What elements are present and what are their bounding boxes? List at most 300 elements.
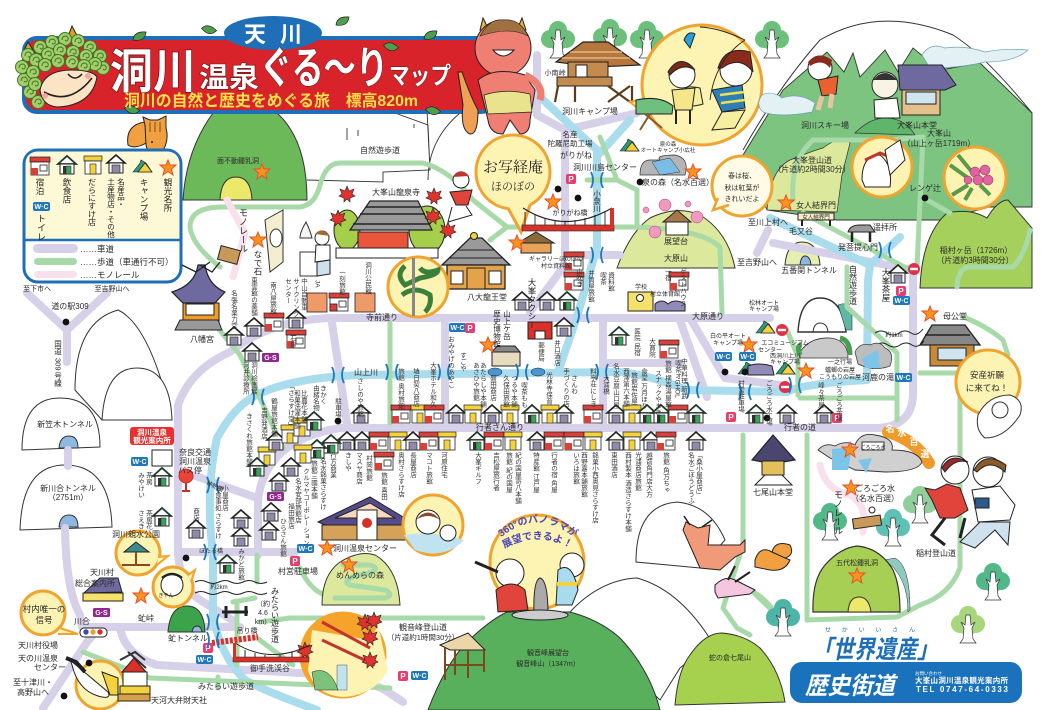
title text: 洞川 <box>110 45 196 98</box>
shop labels above road: ごろごろ茶屋 <box>834 381 843 422</box>
名水百選 arc <box>885 423 930 463</box>
callout: 春は桜、秋は紅葉がきれいだよ: 春は桜、 <box>728 171 756 180</box>
temple: 七尾山本堂 <box>752 435 795 485</box>
mountain: 稲村ヶ岳 <box>920 200 1032 288</box>
map place names: 村立資料館 <box>541 262 571 270</box>
hill: めんめらの森 <box>322 554 400 605</box>
名水百選 arc: 名 <box>885 423 895 434</box>
shop labels below road, left block: クルマヤコーポレーション <box>302 468 310 546</box>
shop labels below road, left block: お食事処 さらすけ <box>214 485 222 539</box>
shop labels above road: 盤田商店 <box>488 374 497 402</box>
map place names: キャンプ場 <box>770 358 800 366</box>
monolith: なで石 <box>265 210 283 272</box>
mountain: 面不動鍾乳洞 <box>183 113 307 200</box>
map place names: 天の川温泉 <box>18 653 58 663</box>
no entry signs <box>776 263 920 393</box>
shop labels below road, right block: 大峯ギルフ <box>474 451 482 485</box>
shop labels above road: 大浦橋 <box>602 374 610 396</box>
map place names: 洞川スキー場 <box>801 120 849 130</box>
map place names: 奈良交通 <box>179 447 211 457</box>
map place names: 大峯登山道 <box>792 155 832 165</box>
vertical road and place labels: 309 <box>54 358 62 371</box>
shop labels above road: おみやげのあやこ <box>446 336 455 388</box>
vertical road and place labels: みたらい遊歩道 <box>270 587 280 644</box>
map place names: 名産 <box>562 129 578 139</box>
map place names: 七尾山本堂 <box>753 487 793 497</box>
map place names: 毛又谷 <box>789 226 813 236</box>
legend labels: 飲食店 <box>62 177 72 204</box>
shop labels above road: 旅館 奥村旅館 <box>396 367 405 410</box>
squirrel <box>128 116 167 155</box>
shop labels above road: 東雲館の薬舗 <box>250 276 258 317</box>
shop labels below road, right block: 光浦商店旅館 <box>634 451 642 492</box>
shop labels above road: 資料館 <box>606 271 615 293</box>
shop labels below road, left block: 村岡旅館 <box>364 454 373 482</box>
shop labels below road, left block: マスヤ商店 <box>354 452 363 486</box>
map place names: 泉の森 <box>660 140 677 148</box>
map place names: ギャラリーほのぼの <box>529 256 583 263</box>
map place names: レンゲ辻 <box>909 183 941 193</box>
shop labels below road, left block: きかく <box>318 385 327 405</box>
map place names: 蛇の倉七尾山 <box>709 653 751 662</box>
名水百選 arc: 百 <box>909 437 919 447</box>
small waterfall: 泉の森 <box>640 155 701 179</box>
walking paths (歩道) <box>83 137 1030 688</box>
vertical road and place labels: 国道 <box>53 340 62 356</box>
legend line keys: ……車道 <box>80 244 115 254</box>
shop labels below road, left block: 茶房花 <box>144 509 153 531</box>
shop labels below road, left block: きさくれ旅館本舗 <box>244 413 253 466</box>
tunnel: 虻トンネル <box>168 606 205 632</box>
legend line keys <box>33 244 174 280</box>
circle: safe birth prayer: 安産祈願 <box>970 370 1004 380</box>
suspension bridge: みたらい <box>233 643 310 662</box>
map place names: 至下市へ <box>23 284 51 293</box>
title text: マップ <box>389 63 451 90</box>
icon: camp at 泉の森 <box>620 139 639 151</box>
map place names: 稲村登山道 <box>916 548 956 558</box>
blue oval: 天川 <box>224 16 322 50</box>
lookout: 展望台 and cherry blossoms <box>643 199 703 238</box>
monorail car: lower <box>852 507 882 529</box>
map place names: きやん <box>158 592 174 599</box>
circle: 親水公園 <box>116 531 168 575</box>
shop labels above road: 井筒屋旅館 <box>586 269 595 304</box>
map place names: 洞川温泉センター <box>333 543 397 553</box>
shop labels above road: 喫茶もも <box>520 381 528 408</box>
white hill behind 観音峰 <box>570 578 712 700</box>
shop labels above road <box>230 261 843 427</box>
mountain: 五代松鍾乳洞 <box>813 546 910 612</box>
map place names: センター <box>34 663 66 672</box>
map place names: バス停 <box>178 465 202 475</box>
map place names: 観音峰展望台 <box>527 648 569 657</box>
map place names: 至吉野山へ <box>737 258 777 267</box>
map place names: 4.6 <box>258 610 268 617</box>
map place names: 吊り橋 <box>236 626 258 635</box>
shop labels below road, right block: 西野嘉本舗旅館 <box>580 452 588 499</box>
mountain: 観音峰 <box>428 612 660 710</box>
map place names: 新笠木トンネル <box>37 419 93 429</box>
shop labels above road: 旅館岩佐屋 <box>630 371 638 406</box>
oni character <box>458 18 541 134</box>
traffic light <box>80 628 107 637</box>
deer <box>683 516 745 570</box>
panel: contact box 歴史街道: 歴史街道 <box>805 673 899 700</box>
shop labels below road, left block <box>136 361 448 582</box>
woman gate: 女人結界門: 女人結界門 <box>802 213 830 221</box>
shop labels below road, right block: 西村製本 酒造さらすけ本舗 <box>624 452 632 533</box>
camp icons <box>738 321 814 378</box>
hill: 五番関トンネル <box>785 242 820 265</box>
vertical road and place labels: なで石 <box>253 250 263 276</box>
shop labels above road: 村営駐車場 <box>736 379 745 414</box>
shop labels below road, left block: 洞川絵画展 <box>250 361 258 396</box>
map place names: 八幡宮 <box>190 334 214 344</box>
orange shops <box>307 293 375 312</box>
map place names: 洞川キャンプ場 <box>562 106 618 116</box>
buildings: street shops <box>153 252 907 573</box>
map place names: こうもりの岩屋 <box>819 373 861 381</box>
legend labels: 名産品・ <box>116 177 126 208</box>
shop labels above road: あさひや旅館 <box>472 362 480 402</box>
heading: 世界遺産: せ か い い さ ん <box>825 627 915 634</box>
cave: エコミュージアム cave and waterfall <box>798 338 892 369</box>
shop labels below road, left block: 「さらすけ堂」 <box>286 383 295 428</box>
stars: sights <box>250 164 865 583</box>
callout: 村内唯一の信号: 信号 <box>35 615 53 625</box>
shop labels below road, right block: 名水ごぼうどうふ <box>686 451 695 504</box>
vertical road and place labels: 小泉川 <box>592 190 602 213</box>
map place names: 大峯山本堂 <box>897 120 937 130</box>
temple: 大峯山龍泉寺 <box>330 186 456 258</box>
title text: ぐる〜り <box>260 44 388 93</box>
blue oval: 天川: 天 川 <box>244 22 302 47</box>
panel: contact box 歴史街道 <box>790 662 1022 703</box>
map place names: 山上川 <box>354 368 378 377</box>
map place names: 稲村ヶ岳（1726m） <box>940 245 1012 255</box>
map place names: 観音峰山（1347m） <box>516 659 580 668</box>
shop labels above road: 名張名薬力堂 <box>230 289 238 329</box>
shop labels above road: 大寶院 <box>648 337 656 359</box>
clouds and ski character <box>759 46 1028 115</box>
legend line keys: ……モノレール <box>80 270 140 280</box>
map place names: 学校 <box>635 283 647 291</box>
shop labels below road, left block: 福田旅店 <box>286 502 295 530</box>
shop labels above road: つるや本舗 <box>510 375 518 409</box>
vertical road and place labels: 歴史博物館 <box>492 310 502 349</box>
shop labels below road, right block: 東田酒店 <box>610 451 618 479</box>
shop labels below road, left block: 商店 <box>192 507 200 522</box>
map place names: 洞川川島センター <box>573 162 637 172</box>
map place names: 約2km <box>210 583 228 591</box>
black bridge <box>222 606 248 618</box>
shop labels above road: 大峯ホテル和久 <box>428 361 437 409</box>
map place names: ほたる橋 <box>199 547 223 555</box>
map place names: （片道約3時間30分） <box>936 255 1014 265</box>
map place names: 遥拝所 <box>873 222 897 232</box>
shop labels above road: スナックやまき <box>654 370 662 416</box>
shop labels above road: 旅館 横森湯屋館 <box>664 359 672 409</box>
map place names: 河鹿の滝 <box>862 372 894 382</box>
map place names: 大原山 <box>664 253 688 263</box>
vertical road and place labels: モノレール <box>833 490 843 535</box>
camp hut: 洞川キャンプ場 <box>555 42 640 102</box>
shop labels above road: サイクリング <box>292 278 300 317</box>
shop labels above road: すごや <box>458 352 467 372</box>
map place names: （約 <box>256 599 270 608</box>
circle: safe birth prayer: に来てね！ <box>966 383 1008 393</box>
monorail <box>227 200 864 532</box>
map place names: オートキャンプ小広社 <box>641 146 696 154</box>
shop labels above road: 喫茶オGHOL <box>674 359 682 398</box>
white hills with tunnels, left <box>20 310 172 530</box>
legend labels: 宿泊 <box>35 177 45 196</box>
red bridge: 吊り橋 <box>212 637 258 643</box>
shop labels above road: 西澤第六本舗 <box>622 368 630 408</box>
map place names: エコミュージアム <box>761 340 809 347</box>
shop labels below road, right block: 「桑小屋商店」 <box>694 452 703 498</box>
map place names: 一之行場 <box>828 358 852 366</box>
map place names: 天川村 <box>90 567 114 577</box>
monorail car <box>218 246 240 264</box>
subtitle: 洞川の自然と歴史をめぐる旅 標高820m <box>124 91 418 110</box>
shop labels below road, right block: 旅館 紀の国屋 <box>504 451 513 494</box>
character: climber <box>448 171 472 222</box>
map place names: 新川合トンネル <box>40 483 96 493</box>
shop labels below road, left block: みやけい <box>136 472 145 498</box>
circle: bath <box>403 495 464 555</box>
observation deck <box>440 633 485 680</box>
white hill with deer <box>636 502 725 568</box>
shop labels below road, right block: 旅館 角万ちゃ <box>662 451 670 493</box>
rocks: ごろごろ水 <box>818 434 922 495</box>
legend labels: トイレ <box>36 214 46 241</box>
tourist information box: 観光案内所 <box>133 435 171 445</box>
map place names: 八大龍王堂 <box>467 292 507 302</box>
shop labels below road, right block: 銘菓小西奥見さらすけ店 <box>590 451 599 525</box>
building: 洞川温泉センター <box>318 497 408 555</box>
shop labels above road: 食堂 万月ほり <box>640 368 648 409</box>
temple: 大峯山本堂 with monk <box>872 65 956 118</box>
map place names: 発菩提心門 <box>838 242 878 252</box>
shop labels below road, left block: さえき <box>136 510 145 530</box>
shop labels above road: 光林寺保育 <box>544 371 553 405</box>
hill: 大原山 <box>617 211 735 268</box>
vertical road and place labels: 大峯タクシー <box>527 277 537 329</box>
post office and school buildings <box>152 292 685 466</box>
wave marks: 約2km <box>195 580 267 594</box>
shop labels above road: 医院 民宿 <box>632 328 641 357</box>
circle: character with antennae <box>133 567 195 607</box>
suspension bridge: がりがね橋 <box>522 208 614 231</box>
map place names: 白の平オート <box>710 332 746 340</box>
callout: 村内唯一の信号 <box>21 591 78 635</box>
map place names: 洞川温泉 <box>179 456 211 466</box>
map place names: 母公堂 <box>943 311 967 321</box>
shop labels below road, right block: 特産館 江戸屋 <box>532 451 540 494</box>
circle: rhododendron flower <box>944 147 1006 209</box>
map place names: 松林オート <box>749 299 779 307</box>
vertical road and place labels: 号線 <box>53 372 62 388</box>
shop labels below road, left block: 長屋商店 <box>408 452 417 479</box>
shop labels above road: 南八屋旅館 <box>268 281 277 316</box>
callout: お写経庵 ほのぼの: お写経庵 <box>483 158 543 176</box>
shop labels above road: 中華料理 新武 <box>680 357 688 399</box>
circle: safe birth prayer <box>956 350 1021 438</box>
shop labels above road: 郵便局 <box>536 342 545 363</box>
map place names: がりがね橋 <box>552 208 588 217</box>
bridge marks <box>204 172 891 648</box>
panel: contact box 歴史街道: お問い合わせ <box>915 670 942 677</box>
circle: kids fishing and cooking <box>630 25 762 145</box>
legend icons <box>30 155 176 175</box>
map place names: 西洞川上川 <box>770 352 800 360</box>
shop labels above road: 中山自動車 <box>300 277 308 312</box>
map place names: 天河大弁財天社 <box>151 695 207 705</box>
map place names: 女人結界門 <box>796 200 836 210</box>
shop labels below road, left block: 旅館 喜田 <box>380 471 388 501</box>
map place names: キャンプ場 <box>749 305 779 313</box>
squirrel and rabbit <box>715 544 792 598</box>
map place names: 自然遊歩道 <box>360 145 400 155</box>
green mountain range: 大峯山 <box>743 48 1032 220</box>
map place names: 大峯山 <box>927 128 951 138</box>
callout: 村内唯一の信号: 村内唯一の <box>23 604 65 614</box>
map place names: 村営駐車場 <box>278 566 318 576</box>
location dots <box>61 179 928 699</box>
shop labels below road, left block: 旅館三國本舗 <box>310 459 318 500</box>
river wave marks: 約1km <box>875 329 924 347</box>
shop labels above road: 洞川公民館 <box>364 261 372 296</box>
walking children <box>925 456 1015 548</box>
museum building <box>480 337 520 366</box>
star: めんめらの森 <box>341 557 357 572</box>
vertical road and place labels: 大峯茶屋 <box>881 267 891 303</box>
map place names: 泉の森（名水百選） <box>642 177 714 187</box>
map place names: 陀羅尼助工場 <box>548 138 593 148</box>
map place names: 天川村役場 <box>18 640 58 650</box>
shop labels below road, left block: 鶴屋旅館本舗 <box>270 397 278 438</box>
map place names: 神舵橋 <box>205 479 225 494</box>
map place names: 五代松鍾乳洞 <box>836 558 878 567</box>
shop labels below road, left block: 名水安部旅館店 <box>294 477 302 525</box>
mountain: 蛇の倉七尾山 <box>675 633 785 705</box>
map place names: 虻トンネル <box>168 633 208 643</box>
legend labels: だらにすけ店 <box>88 178 96 227</box>
shop labels above road: 名水豆腐山口屋 <box>612 362 620 410</box>
leaves <box>124 17 441 118</box>
vertical road and place labels: 自然遊歩道 <box>848 264 858 306</box>
woman gate: 女人結界門 <box>778 195 834 226</box>
badges: WC, P, GS <box>93 174 912 681</box>
shop labels above road: さしのや旅館 <box>356 378 364 418</box>
tourist information box: 洞川温泉 <box>137 427 167 437</box>
title text <box>110 44 451 98</box>
shop labels below road, left block: 比嘉花本舗 <box>300 389 308 424</box>
legend labels <box>35 177 173 241</box>
map place names: 至川上村へ <box>748 217 788 227</box>
shop labels above road: 峰々茶屋 <box>816 381 825 409</box>
shop labels above road: 手づくりの店 <box>562 367 570 408</box>
shop labels below road, left block: 名水銘菓さらすけ <box>318 457 327 510</box>
legend labels: 観光名所 <box>163 177 173 213</box>
map place names: 高野山へ <box>17 687 49 697</box>
vertical road and place labels <box>53 190 891 644</box>
title text: 温泉 <box>199 62 259 93</box>
vertical road and place labels: 山上ケ岳 <box>502 310 512 341</box>
shop labels below road, left block: ひらさん旅館 <box>278 518 287 558</box>
callout: お写経庵 ほのぼの <box>476 135 550 232</box>
名水百選 arc: 水 <box>897 427 907 438</box>
map place names: みたらい遊歩道 <box>198 681 254 691</box>
shop labels below road, left block: 由緒名物 <box>312 384 320 412</box>
circle: dragon <box>388 257 448 317</box>
hill: 大峯登山道 <box>767 140 850 212</box>
legend labels: 土産物店・その他 <box>106 177 116 239</box>
shop labels above road: あたらしや本舗 <box>478 362 487 409</box>
map place names: 展望台 <box>664 236 688 246</box>
遥拝所 shelter <box>848 225 875 242</box>
shop labels above road: 料亭荘にしき <box>588 367 597 407</box>
map place names: 至吉野山へ <box>94 285 130 293</box>
panel: contact box 歴史街道: 大峯山洞川温泉観光案内所 <box>915 675 1008 685</box>
shop labels above road: 一刻旅館 <box>338 269 346 296</box>
heading: 世界遺産: 「世界遺産」 <box>812 636 938 664</box>
map place names: （片道約1時間30分） <box>387 632 459 642</box>
vertical road and place labels: モノレール <box>238 208 248 253</box>
shrine: 天河大弁財天社 <box>118 652 150 701</box>
circle: waterfall gorge <box>297 612 388 698</box>
map place names: 蟷螂の岩屋 <box>825 366 855 374</box>
map place names: 約1km <box>885 331 903 339</box>
circle: panorama <box>474 514 586 620</box>
shop labels above road: 山吹き <box>574 268 583 288</box>
map place names: km） <box>255 618 271 626</box>
legend line keys: ……歩道（車通行不可） <box>80 257 174 267</box>
shop labels below road, right block: 越前角門店大方 <box>644 451 653 499</box>
shop labels below road, left block: みかど旅館 <box>236 548 245 582</box>
map place names: 小南峠 <box>544 68 566 77</box>
map place names: 川合 <box>74 616 90 626</box>
trees <box>541 19 1010 643</box>
circle: panorama: 展望できるよ！ <box>502 530 570 548</box>
map place names: 寺前通り <box>366 312 398 322</box>
circle: court lady <box>66 658 124 709</box>
map place names: 五番関トンネル <box>781 265 837 275</box>
shop labels below road, left block: 茶房 <box>144 471 153 486</box>
shop labels below road, left block: マコト旅館 <box>424 452 433 486</box>
map place names: 面不動鍾乳洞 <box>217 156 259 165</box>
shop labels below road, right block: 吉松屋旅行者 <box>492 452 500 492</box>
white tunnel hill with shrub <box>798 298 852 332</box>
circle: pilgrim <box>852 137 912 197</box>
callout: 春は桜、秋は紅葉がきれいだよ: 秋は紅葉が <box>724 183 760 192</box>
panel: contact box 歴史街道: TEL 0747-64-0333 <box>916 685 1009 694</box>
building: gallery <box>509 232 554 253</box>
shop labels above road: 久保田旅館 <box>502 374 510 409</box>
shop labels below road, left block: 河原住宅 <box>440 452 448 478</box>
circle: panorama: 360°のパノラマが <box>498 514 579 536</box>
shop labels above road: さんわ <box>570 375 578 395</box>
shop labels above road: 一宿 <box>664 268 672 282</box>
building: 総合案内所 <box>83 578 123 601</box>
temple: 母公堂 <box>920 306 982 366</box>
rocks: ごろごろ水: ごろごろ水 <box>860 444 886 451</box>
map place names: 虻峠 <box>138 613 154 623</box>
callout: お写経庵 ほのぼの: ほのぼの <box>491 180 535 193</box>
mascot: green curly hair character <box>16 26 110 108</box>
